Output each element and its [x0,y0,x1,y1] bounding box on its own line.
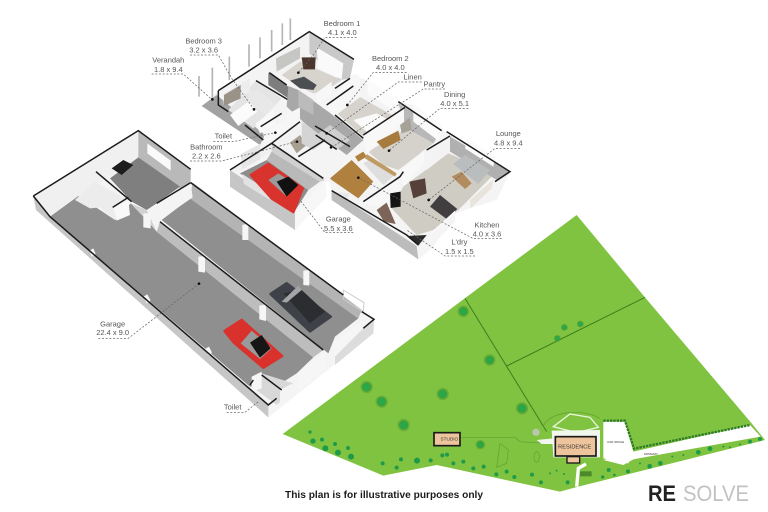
dining [363,103,442,170]
garage small [567,457,580,463]
site plan [283,215,765,492]
label: Dining [388,90,469,152]
label: Verandah: Verandah [152,56,184,65]
label: Kitchen: 4.0 x 3.6 [473,229,501,238]
label: Toilet: Toilet [215,132,233,141]
garage labels [96,282,258,412]
label: Dining: 4.0 x 5.1 [440,99,469,108]
floor plan: large garage [33,131,375,417]
label: Garage 22.4 x 9.0: 22.4 x 9.0 [96,328,129,337]
label: Toilet (garage) [224,402,258,412]
label: Linen [325,73,422,135]
garden paths [462,412,600,467]
access drive [577,464,586,487]
logo: RE SOLVE: SOLVE [683,481,749,506]
wall: end returns [334,322,362,357]
label: Garage 5.5 x 3.6: 5.5 x 3.6 [324,224,353,233]
shrubs [308,430,762,484]
label: Bedroom 1 [297,19,360,74]
wall: right bay far side [190,183,362,318]
label: Bathroom [190,140,298,161]
label: Bedroom 3 [185,37,255,111]
hedge [603,421,750,449]
label: Bedroom 2 [346,54,409,106]
silhouette [202,32,510,259]
residence: RESIDENCE [558,445,591,451]
toilet corner [252,373,293,405]
label: L'dry: 1.5 x 1.5 [445,247,474,256]
label: Toilet [213,131,277,142]
central hall [268,73,288,98]
label: Lounge: Lounge [496,129,521,138]
label: Kitchen [357,176,502,239]
logo: RE SOLVE: RE [648,481,676,506]
verandah posts [199,18,290,100]
label: Garage 5.5 x 3.6: Garage [326,215,351,224]
label: Kitchen: Kitchen [475,220,499,229]
label: Linen: Linen [403,73,422,82]
bathroom and toilet [273,121,350,175]
label: Lounge [427,129,523,201]
wall tops [218,32,510,245]
label: Bedroom 1: Bedroom 1 [324,19,360,28]
car space [603,422,633,463]
studio: STUDIO [441,437,459,442]
logo: RE SOLVE [648,481,749,506]
verandah floor [202,95,265,145]
wall: exterior left [33,196,268,417]
label: L'dry [407,230,475,256]
land parcel [283,215,765,492]
pilasters [242,223,248,240]
label: Bedroom 1: 4.1 x 4.0 [328,28,357,37]
label: Toilet (garage): Toilet [224,403,242,412]
wall tops [33,131,374,405]
label: Pantry [330,80,445,149]
car space label: CAR SPACE [607,440,624,444]
table [112,160,133,175]
label: Bedroom 3: Bedroom 3 [185,37,222,46]
label: Dining: Dining [444,90,465,99]
label: Verandah: 1.8 x 9.4 [154,65,183,74]
red car [225,320,282,368]
bedroom 2 [327,74,398,137]
label: Garage 22.4 x 9.0 [96,282,200,338]
bedroom 1 [267,32,354,104]
floor: left bay [50,196,313,388]
disclaimer: This plan is for illustrative purposes only [285,490,483,501]
small hedge [580,471,592,476]
bedroom 3 [223,78,282,133]
label: Bathroom: 2.2 x 2.6 [192,152,221,161]
studio [434,433,460,446]
boundary lines [465,297,645,432]
label: Lounge: 4.8 x 9.4 [494,139,523,148]
label: Verandah [152,56,214,101]
large trees [362,307,583,448]
label: Garage 5.5 x 3.6 [300,200,353,233]
label: Garage 22.4 x 9.0: Garage [100,320,125,329]
floor: back room [110,157,180,210]
driveway [603,425,761,465]
exterior wall [332,191,418,259]
residence surround [552,430,600,457]
stairs and mezzanine [75,182,128,220]
driveway label: DRIVEWAY [644,452,658,456]
label: Bedroom 2: Bedroom 2 [372,54,409,63]
floor: right bay [162,198,358,353]
small garage [230,143,327,230]
label: Bedroom 3: 3.2 x 3.6 [189,46,218,55]
lounge [363,137,510,246]
label: L'dry: L'dry [451,237,468,246]
residence [555,437,596,456]
label: Bedroom 2: 4.0 x 4.0 [376,63,405,72]
floor plan: house [152,18,523,259]
kitchen [330,152,397,200]
label: Pantry: Pantry [424,80,445,89]
dark car [271,283,331,331]
label: Bathroom: Bathroom [190,142,223,151]
wall: central divider [157,222,323,357]
